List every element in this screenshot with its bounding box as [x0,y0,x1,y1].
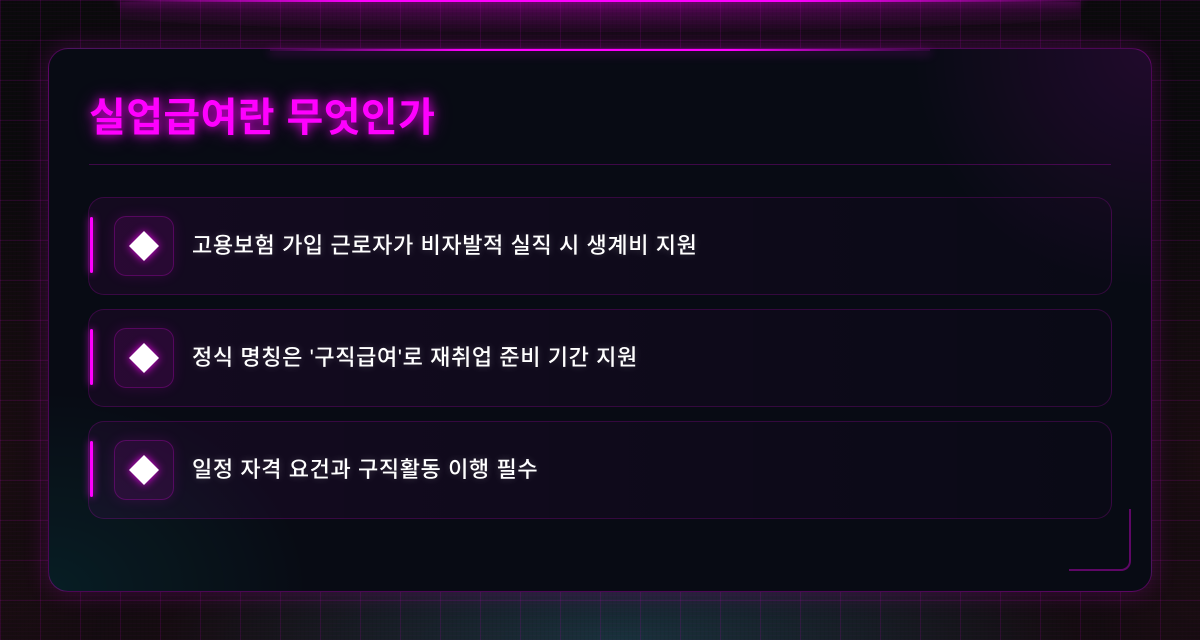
item 2 text: 정식 명칭은 '구직급여'로 재취업 준비 기간 지원 [192,345,638,370]
item 3 accent bar [90,441,93,497]
title: 실업급여란 무엇인가 [89,96,435,140]
list item 1 [88,197,1112,295]
list item 3 [88,421,1112,519]
panel: main card [48,48,1152,592]
card top neon bar [270,49,930,51]
item 1 accent bar [90,217,93,273]
icon: diamond 1 [114,216,174,276]
icon: diamond 3 [114,440,174,500]
item 3 text: 일정 자격 요건과 구직활동 이행 필수 [192,457,538,482]
list item 2 [88,309,1112,407]
top neon bar [120,0,1080,2]
item 2 accent bar [90,329,93,385]
corner bracket decoration [1069,509,1131,571]
item 1 text: 고용보험 가입 근로자가 비자발적 실직 시 생계비 지원 [192,233,697,258]
icon: diamond 2 [114,328,174,388]
